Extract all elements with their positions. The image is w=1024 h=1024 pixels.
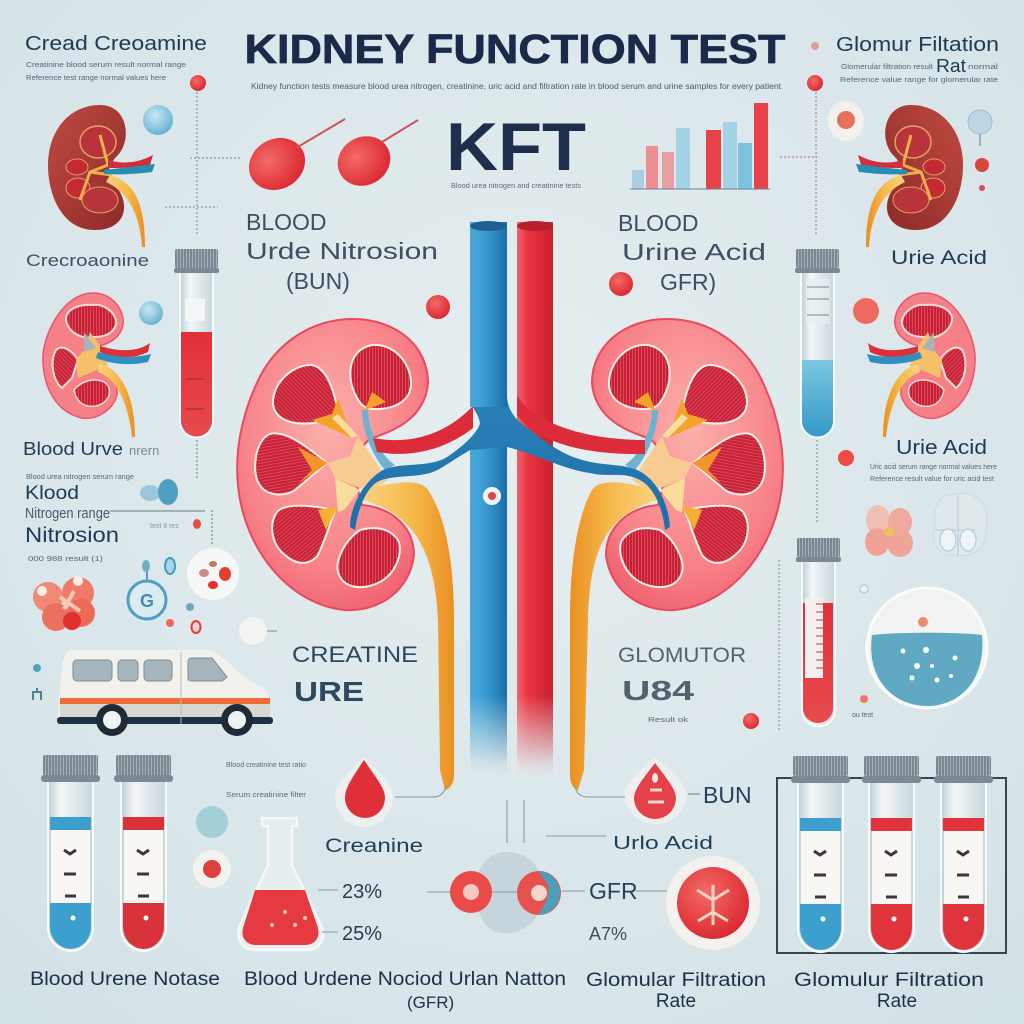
label: Blood Urine Acid GFR bbox=[618, 210, 766, 295]
small markers right: ou test bbox=[852, 712, 873, 719]
label: Blood Urea Nitrogen bbox=[246, 209, 438, 294]
label: Blood Nitrosion: Nitrosion bbox=[25, 524, 119, 547]
test tube: right red bbox=[796, 538, 841, 726]
fine print: top left: Reference test range normal values here bbox=[26, 75, 166, 82]
icon: red flower bbox=[33, 576, 95, 631]
renal artery branches bbox=[373, 395, 645, 454]
dots and fine print near guide: 000 988 result (1) bbox=[28, 556, 103, 563]
fade over vessels bbox=[468, 695, 556, 777]
subtitle fine print: Kidney function tests measure blood urea nitrogen, creatinine, uric acid and filtration rate in blood serum and urine samples for every patient bbox=[251, 82, 782, 91]
fine print: right bbox=[870, 464, 997, 483]
percentages: 25% bbox=[342, 923, 382, 945]
label: Blood Urea Nitrogen bottom: Blood Urdene Nociod Urlan Natton bbox=[244, 969, 566, 990]
title: KIDNEY FUNCTION TEST bbox=[244, 26, 786, 72]
label: Uric Acid right: Urie Acid bbox=[896, 437, 987, 459]
icons: small cell circles bbox=[193, 806, 231, 888]
label: Blood Urine Nitrates: Blood Urene Notase bbox=[30, 969, 220, 990]
test tubes: bottom right with frame bbox=[777, 756, 1006, 953]
icon: small markers by van bbox=[33, 603, 200, 700]
label: GFR bottom: (GFR) bbox=[407, 993, 454, 1012]
heading: top right: Glomur Filtation bbox=[836, 34, 999, 56]
fine print: top left bbox=[26, 62, 186, 82]
small markers right bbox=[852, 585, 873, 719]
label: Glomerular Filtration Rate bbox=[586, 970, 766, 1012]
icon: blood drop left bbox=[335, 757, 393, 827]
label: BUN: BUN bbox=[703, 782, 752, 808]
fine print by drop labels: Serum creatinine filter bbox=[226, 792, 307, 799]
label: Blood Urea Nitrogen: BLOOD bbox=[246, 209, 327, 235]
icon: cell top right bbox=[828, 101, 992, 191]
percentages: 23% bbox=[342, 881, 382, 903]
label: Glomerular Filtration Rate right bbox=[794, 970, 984, 1012]
icon: pink flower bbox=[865, 505, 913, 557]
label: Creatine Urea: CREATINE bbox=[292, 642, 418, 667]
fine print by drop labels: Result ok bbox=[648, 717, 689, 724]
label: Glomerular U84: U84 bbox=[622, 675, 695, 706]
ureter: left bbox=[362, 482, 454, 790]
kidney: left middle bbox=[43, 293, 151, 437]
main kidney: left bbox=[237, 319, 428, 610]
label: Uric Acid top right: Urie Acid bbox=[891, 248, 987, 269]
label: Blood Urea Nitrogen: Urde Nitrosion bbox=[246, 238, 438, 264]
icon: blood drop right bbox=[624, 757, 687, 824]
pin and guide: top right bbox=[780, 42, 823, 235]
icon: blue bead left bbox=[139, 301, 163, 325]
fine print: right: Uric acid serum range normal values here bbox=[870, 464, 997, 471]
percentages bbox=[342, 881, 627, 945]
label: Glomerular Filtration Rate: Rate bbox=[656, 991, 696, 1012]
fine print: left: Blood urea nitrogen serum range bbox=[26, 474, 134, 481]
icon: white circle with cells bbox=[187, 548, 239, 600]
label: Blood Urine Acid GFR: BLOOD bbox=[618, 210, 699, 236]
label: Glomerular U84: GLOMUTOR bbox=[618, 644, 746, 667]
fine print by drop labels bbox=[226, 717, 689, 799]
sphere flask bbox=[867, 588, 987, 708]
label: Blood Nitrosion: Klood bbox=[25, 483, 79, 504]
ambulance van bbox=[57, 650, 273, 736]
test tube: right blue bbox=[795, 249, 840, 438]
bar chart bbox=[630, 103, 770, 189]
label: Creatine Urea bbox=[292, 642, 418, 707]
label: GFR: GFR bbox=[589, 878, 638, 904]
label: Uric Acid centre: Urlo Acid bbox=[613, 833, 713, 853]
fine print: top left: Creatinine blood serum result normal range bbox=[26, 62, 186, 69]
label: Glomerular U84 bbox=[618, 644, 746, 706]
test tube: left red bbox=[174, 249, 219, 438]
red disc bbox=[666, 856, 760, 950]
dots and fine print near guide bbox=[28, 519, 201, 563]
dot and guides right bbox=[779, 440, 854, 730]
red dots near centre bbox=[426, 272, 633, 319]
ureter: right bbox=[570, 482, 658, 790]
kidney: right middle bbox=[867, 293, 975, 437]
fine print and Rate: top right: Rat bbox=[936, 56, 966, 76]
label: Creatine Urea: URE bbox=[294, 676, 364, 707]
centre device bbox=[427, 852, 585, 933]
icon: blue ring: G bbox=[140, 591, 154, 611]
label: Glomerular Filtration Rate: Glomular Filtration bbox=[586, 970, 766, 991]
kidney: top right bbox=[856, 105, 963, 247]
pin and guide: top left bbox=[165, 75, 240, 235]
label: Blood Urine Acid GFR: GFR) bbox=[660, 269, 716, 295]
percentages: A7% bbox=[589, 924, 627, 944]
label: Blood Urea Nitrogen: (BUN) bbox=[286, 268, 350, 294]
label: Blood Nitrosion bbox=[25, 483, 119, 547]
label: Creatinine centre: Creanine bbox=[325, 836, 423, 857]
flask bbox=[238, 818, 323, 950]
heading: top left: Cread Creoamine bbox=[25, 33, 207, 55]
connector lines bbox=[318, 785, 667, 932]
icon: white pill bbox=[239, 617, 277, 645]
red oval organs bbox=[239, 119, 418, 200]
fine print: right: Reference result value for uric acid test bbox=[870, 476, 994, 483]
guide lines left bbox=[110, 440, 212, 545]
KFT fine print: Blood urea nitrogen and creatinine tests bbox=[451, 183, 582, 190]
label: Creatinine: Crecroaonine bbox=[26, 251, 149, 270]
fine print and Rate: top right: Reference value range for glomerular rate bbox=[840, 77, 998, 84]
icon: blue bead top left bbox=[143, 105, 173, 135]
fine print and Rate: top right: Glomerular filtration result bbox=[841, 64, 933, 71]
icon: blue cells bbox=[140, 479, 178, 505]
fine print by drop labels: Blood creatinine test ratio bbox=[226, 762, 306, 769]
label: Blood urine: Blood Urve nrern bbox=[23, 439, 159, 459]
marker on blue vessel bbox=[483, 487, 501, 505]
dot: red centre right bbox=[743, 713, 759, 729]
label: Glomerular Filtration Rate right: Glomulur Filtration bbox=[794, 970, 984, 991]
fine print and Rate: top right bbox=[840, 56, 999, 84]
vessel: red tube bbox=[517, 221, 553, 775]
icon: blue ring bbox=[128, 558, 175, 619]
test tubes: bottom left bbox=[41, 755, 173, 951]
kidney: top left bbox=[48, 105, 155, 247]
label: Blood Nitrosion: Nitrogen range bbox=[25, 505, 110, 522]
dots and fine print near guide: test 8 res bbox=[150, 523, 179, 530]
vessel: blue tube bbox=[350, 221, 670, 775]
main kidney: right bbox=[592, 319, 783, 610]
heading: KFT: KFT bbox=[446, 109, 586, 185]
label: Glomerular Filtration Rate right: Rate bbox=[877, 991, 917, 1012]
fine print and Rate: top right: normal bbox=[968, 64, 999, 71]
icon: pale kidneys bbox=[934, 493, 987, 556]
label: Blood Urine Acid GFR: Urine Acid bbox=[622, 239, 766, 265]
dot: right bbox=[853, 298, 879, 324]
